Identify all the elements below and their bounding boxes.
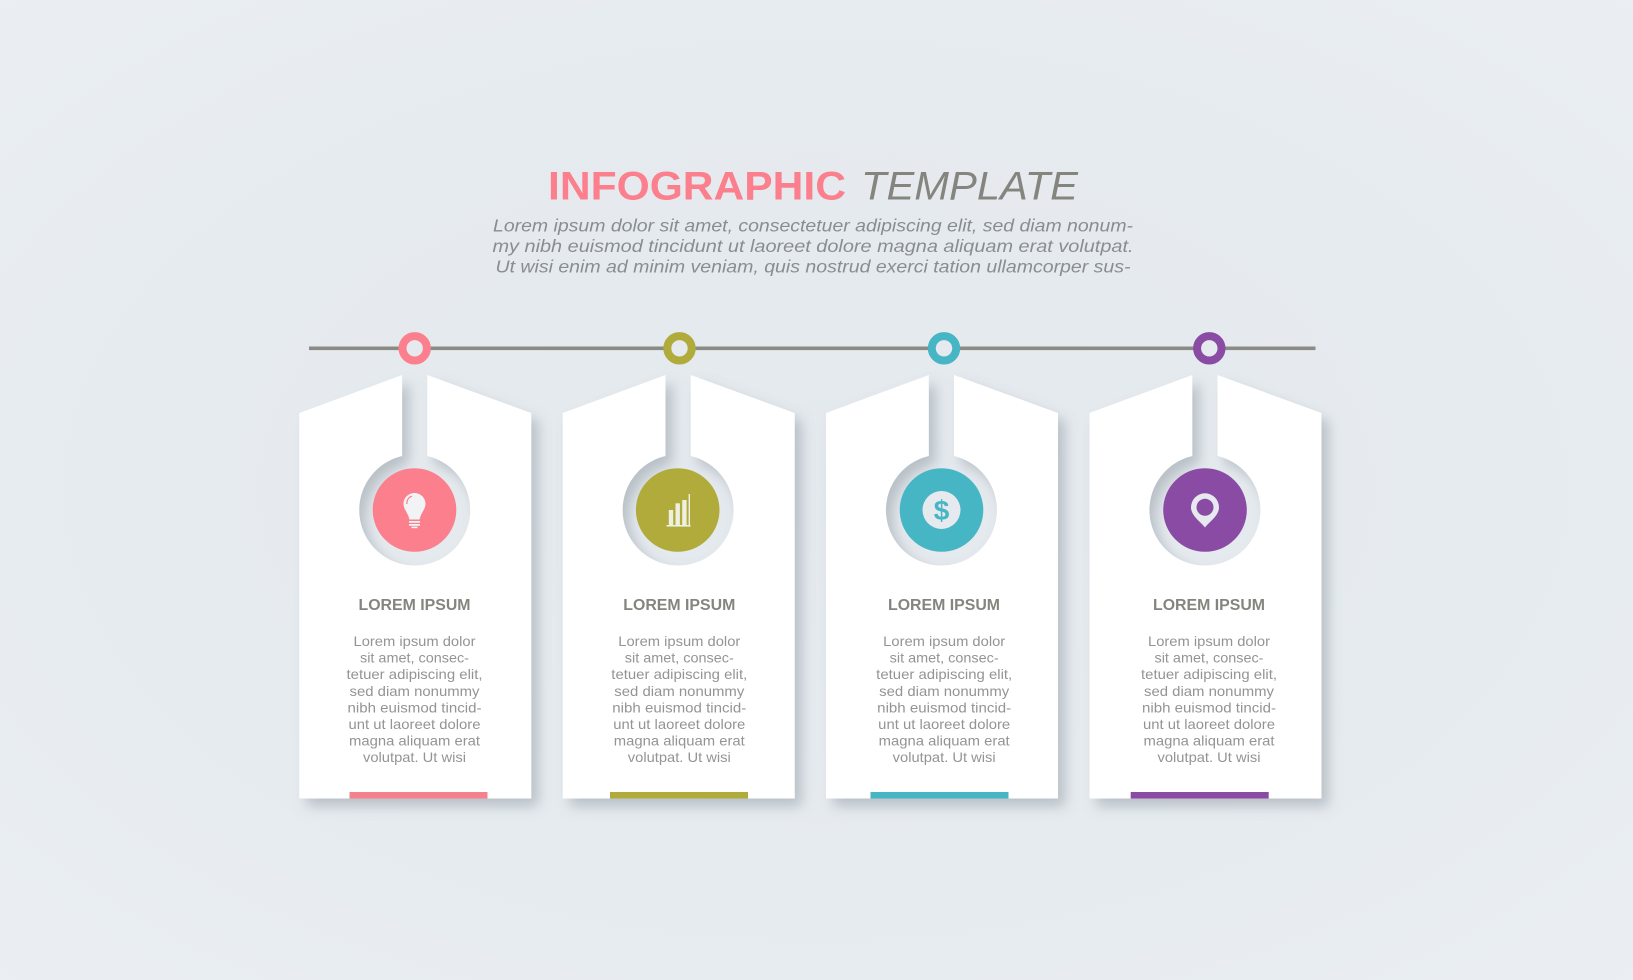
timeline marker 2 (667, 336, 692, 360)
icon: map pin (1191, 493, 1219, 528)
card 2 body text: Lorem ipsum dolor (618, 633, 741, 649)
card 4 body text: Lorem ipsum dolor (1148, 633, 1270, 649)
title: TEMPLATE (861, 164, 1079, 208)
card 3 heading: LOREM IPSUM (888, 597, 1000, 614)
title: INFOGRAPHIC (548, 164, 846, 208)
icon: dollar coin (922, 491, 960, 529)
card 4 body text: sit amet, consec- (1154, 650, 1264, 666)
card 3 accent bar (870, 792, 1008, 798)
card 1 body text: volutpat. Ut wisi (363, 749, 466, 765)
card 1 body text: sed diam nonummy (350, 683, 480, 699)
card 2 body text: sed diam nonummy (614, 683, 744, 699)
icon: dollar coin: $ (934, 495, 950, 526)
card 3 body text: tetuer adipiscing elit, (876, 666, 1012, 682)
card 1 colored circle (373, 468, 456, 552)
icon: bar chart (666, 494, 690, 527)
timeline marker 4 (1197, 336, 1222, 360)
card 1 body text: nibh euismod tincid- (348, 699, 482, 715)
card 3 colored circle (900, 468, 983, 552)
card 2 body text (611, 633, 747, 765)
card 3 body text: magna aliquam erat (879, 733, 1010, 749)
card 1 body text: sit amet, consec- (360, 650, 469, 666)
card 2 accent bar (610, 792, 748, 798)
card 2 shape (563, 375, 795, 798)
panel: card 1 (299, 375, 531, 798)
card 3 body text (876, 633, 1012, 765)
card 3 body text: sed diam nonummy (879, 683, 1009, 699)
card 3 shape (826, 375, 1058, 798)
card 2 body text: tetuer adipiscing elit, (611, 666, 747, 682)
subtitle text block: Ut wisi enim ad minim veniam, quis nostrud exerci tation ullamcorper sus- (496, 256, 1131, 276)
card 1 accent bar (350, 792, 488, 798)
timeline (309, 336, 1316, 360)
card 3 body text: nibh euismod tincid- (877, 699, 1012, 715)
card 2 heading: LOREM IPSUM (623, 597, 735, 614)
card 2 body text: unt ut laoreet dolore (613, 716, 746, 732)
card 4 body text: unt ut laoreet dolore (1143, 716, 1275, 732)
card 2 colored circle (636, 468, 720, 552)
subtitle text block: Lorem ipsum dolor sit amet, consectetuer adipiscing elit, sed diam nonum- (493, 216, 1133, 236)
card 2 body text: volutpat. Ut wisi (628, 749, 731, 765)
card 4 body text: nibh euismod tincid- (1142, 699, 1276, 715)
card 1 body text: Lorem ipsum dolor (354, 633, 476, 649)
card 1 body text: unt ut laoreet dolore (348, 716, 481, 732)
card 3 body text: volutpat. Ut wisi (893, 749, 996, 765)
panel: card 3 (826, 375, 1058, 798)
card 1 body text (346, 633, 482, 765)
card 4 shape (1090, 375, 1322, 798)
card 2 body text: nibh euismod tincid- (612, 699, 747, 715)
card 1 heading: LOREM IPSUM (358, 597, 470, 614)
card 4 heading: LOREM IPSUM (1153, 597, 1265, 614)
card 3 body text: unt ut laoreet dolore (878, 716, 1010, 732)
panel: card 4 (1090, 375, 1322, 798)
card 4 body text: magna aliquam erat (1144, 733, 1275, 749)
panel: card 2 (563, 375, 795, 798)
card 4 body text: tetuer adipiscing elit, (1141, 666, 1277, 682)
card 3 body text: Lorem ipsum dolor (883, 633, 1006, 649)
icon: light bulb (404, 493, 426, 528)
title (548, 164, 1079, 208)
card 4 body text (1141, 633, 1277, 765)
card 1 shape (299, 375, 531, 798)
subtitle text block: my nibh euismod tincidunt ut laoreet dolore magna aliquam erat volutpat. (492, 236, 1134, 256)
timeline marker 3 (932, 336, 956, 360)
card 3 body text: sit amet, consec- (890, 650, 999, 666)
card 2 body text: sit amet, consec- (625, 650, 734, 666)
card 4 body text: volutpat. Ut wisi (1158, 749, 1260, 765)
card 4 accent bar (1131, 792, 1269, 798)
card 2 body text: magna aliquam erat (614, 733, 745, 749)
card 4 colored circle (1163, 468, 1247, 552)
card 4 body text: sed diam nonummy (1144, 683, 1274, 699)
timeline marker 1 (402, 336, 427, 360)
subtitle text block (492, 216, 1134, 276)
card 1 body text: tetuer adipiscing elit, (346, 666, 482, 682)
card 1 body text: magna aliquam erat (349, 733, 480, 749)
